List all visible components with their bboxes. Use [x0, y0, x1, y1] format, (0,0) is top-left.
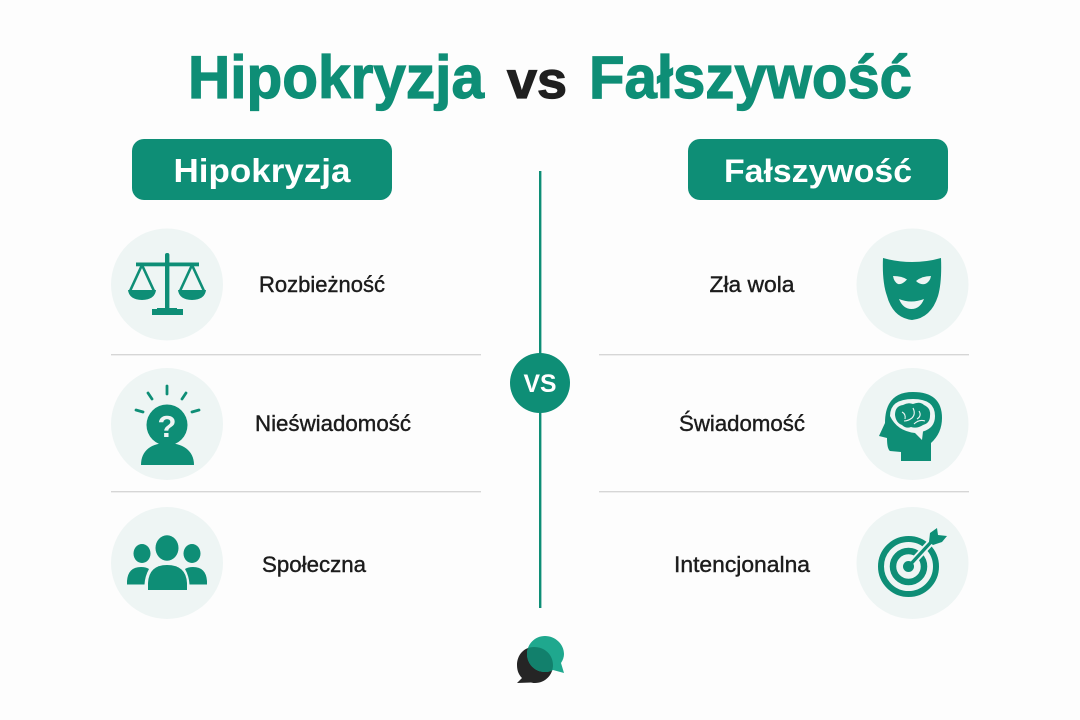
panel heading: Hipokryzja — [132, 139, 392, 200]
icon: head with brain — [856, 368, 968, 480]
icon: theatre mask — [856, 228, 968, 340]
vs badge — [510, 353, 570, 413]
title: Fałszywość — [589, 44, 912, 111]
vs badge: VS — [524, 370, 556, 398]
label: Świadomość: Świadomość — [679, 411, 805, 436]
label: Nieświadomość: Nieświadomość — [255, 411, 411, 436]
icon: scales — [111, 228, 223, 340]
icon: group of people — [111, 507, 223, 619]
panel heading: Hipokryzja: Hipokryzja — [174, 152, 351, 189]
icon: person with question mark — [111, 368, 223, 480]
label: Zła wola: Zła wola — [710, 272, 795, 297]
title — [188, 44, 912, 111]
icon: person with question mark: ? — [158, 409, 176, 444]
label: Społeczna: Społeczna — [262, 552, 367, 577]
icon: target with arrow — [856, 507, 968, 619]
title: vs — [507, 52, 567, 110]
logo: speech bubbles — [517, 636, 564, 683]
title: Hipokryzja — [188, 44, 485, 111]
label: Rozbieżność: Rozbieżność — [259, 272, 385, 297]
panel heading: Fałszywość — [688, 139, 948, 200]
panel heading: Fałszywość: Fałszywość — [724, 153, 912, 189]
central divider line — [539, 171, 541, 608]
label: Intencjonalna: Intencjonalna — [674, 552, 811, 577]
